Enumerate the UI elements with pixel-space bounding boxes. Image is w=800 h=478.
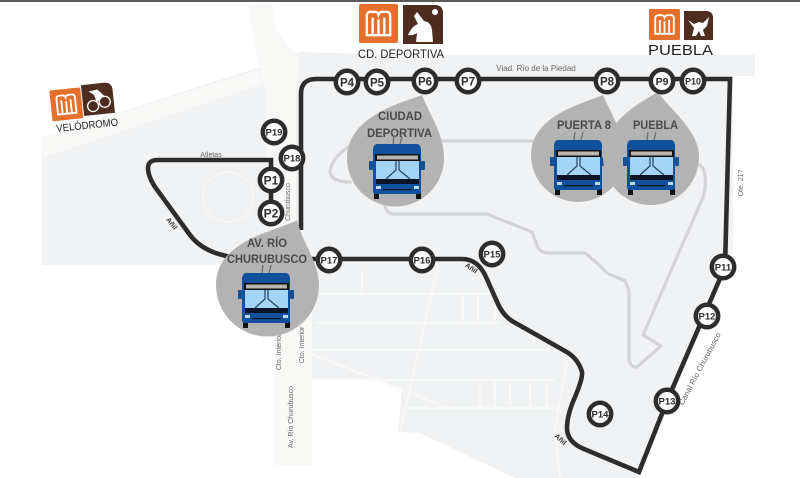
road labels: Añil: [164, 217, 178, 231]
route stops: P15: [484, 250, 501, 260]
route stops: P14: [592, 410, 609, 420]
pin: Av. Río Churubusco: CHURUBUSCO: [227, 252, 307, 266]
route stops: P12: [699, 312, 715, 322]
road labels: Atletas: [200, 152, 222, 159]
pin: Puerta 8: PUERTA 8: [557, 118, 611, 132]
metro station: Velódromo: [49, 82, 119, 135]
route stops: P1: [264, 174, 279, 188]
route stops: P17: [321, 256, 337, 266]
route stops: P8: [600, 76, 615, 88]
road labels: Canal Río Churubusco: [677, 330, 723, 407]
route stops: [260, 70, 734, 425]
pin: Av. Río Churubusco: [216, 220, 319, 336]
road labels: Ote. 217: [738, 169, 745, 196]
road labels: Churubusco: [285, 183, 292, 221]
route stops: P6: [418, 76, 432, 88]
route stops: P13: [659, 396, 675, 408]
pin: Puebla: PUEBLA: [633, 118, 678, 132]
road labels: Viad. Río de la Piedad: [496, 64, 576, 73]
pin: Puerta 8: [531, 95, 625, 202]
road labels: Cto. Interior: [276, 333, 283, 370]
pin: Puebla: [603, 92, 699, 205]
pin: Av. Río Churubusco: AV. RÍO: [247, 235, 287, 250]
road labels: Av. Río Churubusco: [288, 386, 295, 448]
metro station: Ciudad Deportiva: [358, 4, 444, 61]
metro station: Puebla: [648, 9, 713, 59]
route stops: P2: [264, 206, 279, 220]
route stops: P5: [370, 78, 385, 90]
route stops: P9: [656, 76, 669, 88]
metro station: Puebla: PUEBLA: [648, 42, 713, 59]
road labels: Cto. Interior: [299, 326, 306, 363]
route stops: P18: [284, 154, 300, 164]
metro station: Velódromo: VELÓDROMO: [56, 116, 119, 135]
route stops: P11: [715, 262, 732, 274]
route line: [148, 79, 730, 472]
route stops: P16: [414, 256, 430, 266]
top border: [0, 0, 800, 2]
route stops: P4: [340, 78, 355, 90]
road labels: [164, 64, 745, 448]
pin: Ciudad Deportiva: CIUDAD: [378, 109, 422, 123]
pin: Ciudad Deportiva: [347, 95, 444, 206]
road labels: Añil: [553, 433, 567, 447]
pin: Ciudad Deportiva: DEPORTIVA: [367, 126, 432, 140]
route stops: P19: [266, 128, 282, 138]
route stops: P7: [461, 76, 475, 88]
metro station: Ciudad Deportiva: CD. DEPORTIVA: [358, 47, 444, 61]
road labels: Añil: [463, 262, 478, 275]
route stops: P10: [685, 76, 701, 86]
